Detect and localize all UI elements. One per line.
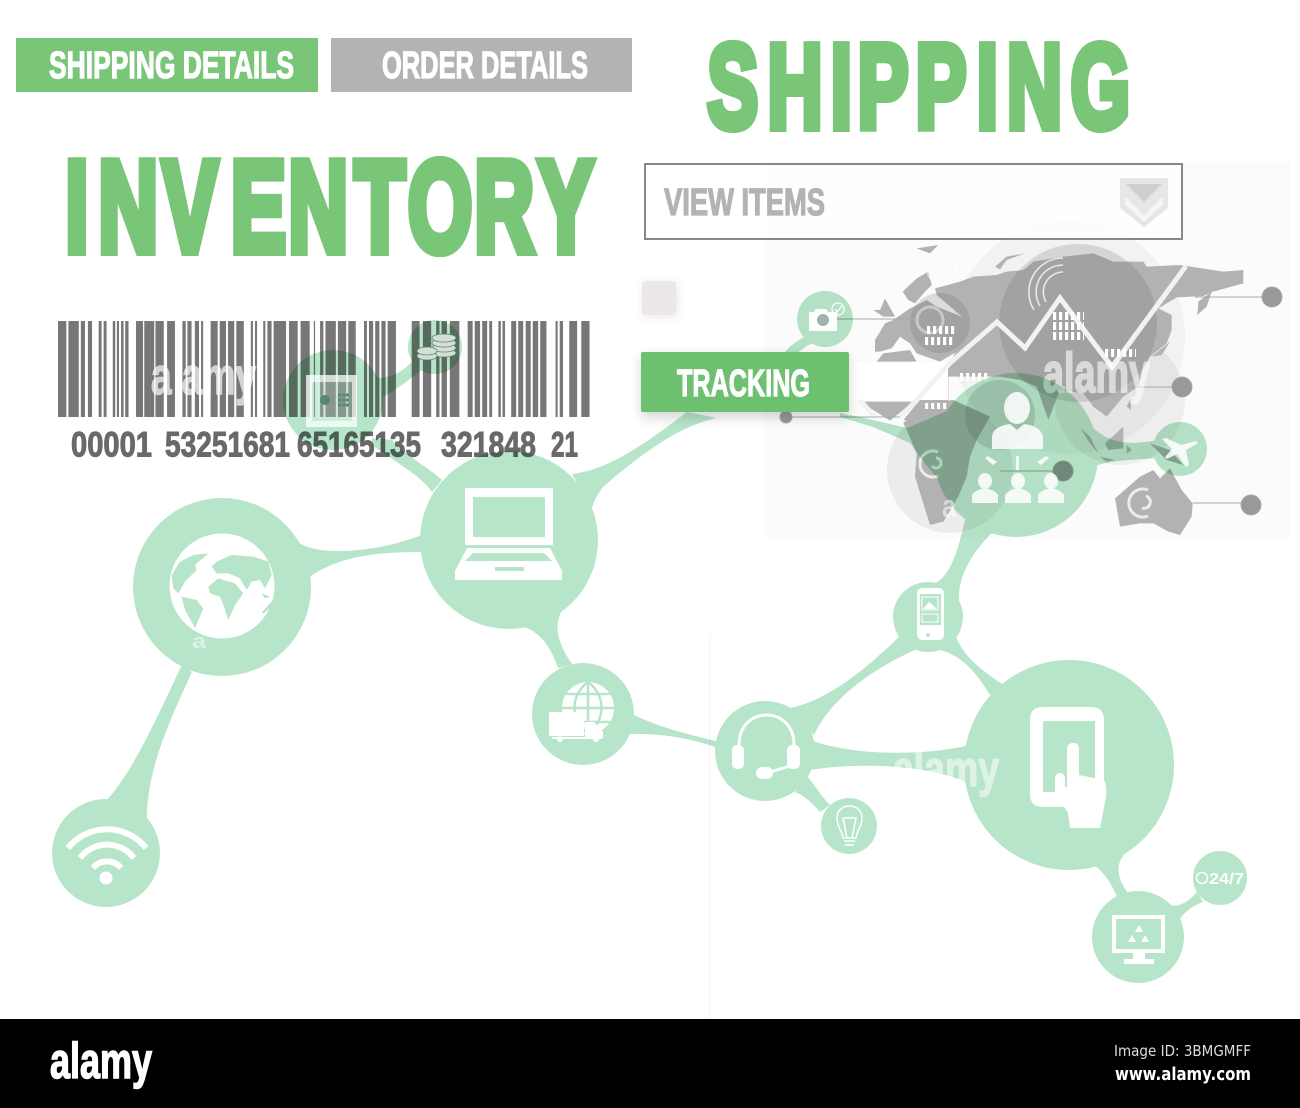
icon: laptop — [455, 488, 562, 580]
icon: airplane — [1162, 438, 1198, 467]
icon: truck and globe — [549, 682, 614, 742]
white block behind tracking — [849, 362, 948, 400]
barcode number — [71, 426, 578, 464]
watermark on blob: alamy — [893, 741, 999, 797]
barcode number: 321848 — [441, 426, 536, 464]
icon: hand on phone — [1030, 707, 1106, 828]
icon: globe — [170, 534, 274, 638]
icon: light bulb — [837, 806, 862, 845]
continents — [860, 245, 1243, 535]
dropdown: view items: VIEW ITEMS — [664, 182, 825, 224]
watermark letter on globe node: a — [192, 631, 207, 653]
tab: shipping details — [16, 38, 318, 92]
map circles — [887, 220, 1185, 533]
website: www.alamy.com — [1115, 1064, 1251, 1085]
icon: headset — [732, 715, 800, 779]
icon: chevron shield — [1120, 178, 1168, 227]
concentric rings — [917, 256, 1150, 517]
africa, indonesia and australia — [860, 400, 1193, 535]
button: tracking: TRACKING — [677, 363, 810, 405]
barcode number: 53251681 — [165, 426, 290, 464]
barcode number: 00001 — [71, 426, 152, 464]
icon: camera — [809, 303, 844, 331]
connectors — [105, 665, 192, 822]
barcode — [58, 321, 590, 464]
chart line — [860, 266, 1186, 417]
panel: world map — [765, 162, 1290, 538]
leader lines and dots — [780, 287, 1282, 515]
icon: coins — [417, 334, 456, 360]
button: tracking — [641, 352, 849, 418]
tab: shipping details: SHIPPING DETAILS — [49, 45, 294, 87]
tab: order details: ORDER DETAILS — [382, 45, 588, 87]
watermark on barcode: a amy — [151, 348, 256, 406]
people rows on map — [925, 316, 1136, 406]
network of nodes — [52, 291, 1247, 983]
watermark letter on africa: a — [942, 488, 956, 524]
barcode number: 21 — [551, 426, 578, 464]
barcode number: 65165135 — [297, 426, 421, 464]
dropdown: view items — [645, 164, 1182, 239]
icon: tablet — [917, 588, 944, 640]
watermark on map: alamy — [1043, 341, 1150, 404]
heading: shipping: SHIPPING — [707, 21, 1130, 154]
icon: 24/7 — [1196, 871, 1244, 888]
node circles — [52, 799, 160, 907]
icon: wifi — [68, 829, 146, 884]
europe and asia — [873, 245, 1243, 420]
heading: inventory: INVENTORY — [65, 134, 593, 278]
dark map circles — [910, 244, 1157, 450]
checkbox — [642, 281, 677, 316]
footer bar — [0, 1019, 1300, 1108]
icon: safe — [306, 375, 357, 427]
icon: manager and team — [972, 392, 1064, 503]
footer logo: alamy — [50, 1033, 152, 1089]
tab: order details — [331, 38, 632, 92]
image id: Image ID: 3BMGMFF — [1114, 1042, 1251, 1060]
icon: 24/7: 24/7 — [1209, 871, 1244, 888]
icon: monitor — [1112, 915, 1165, 964]
